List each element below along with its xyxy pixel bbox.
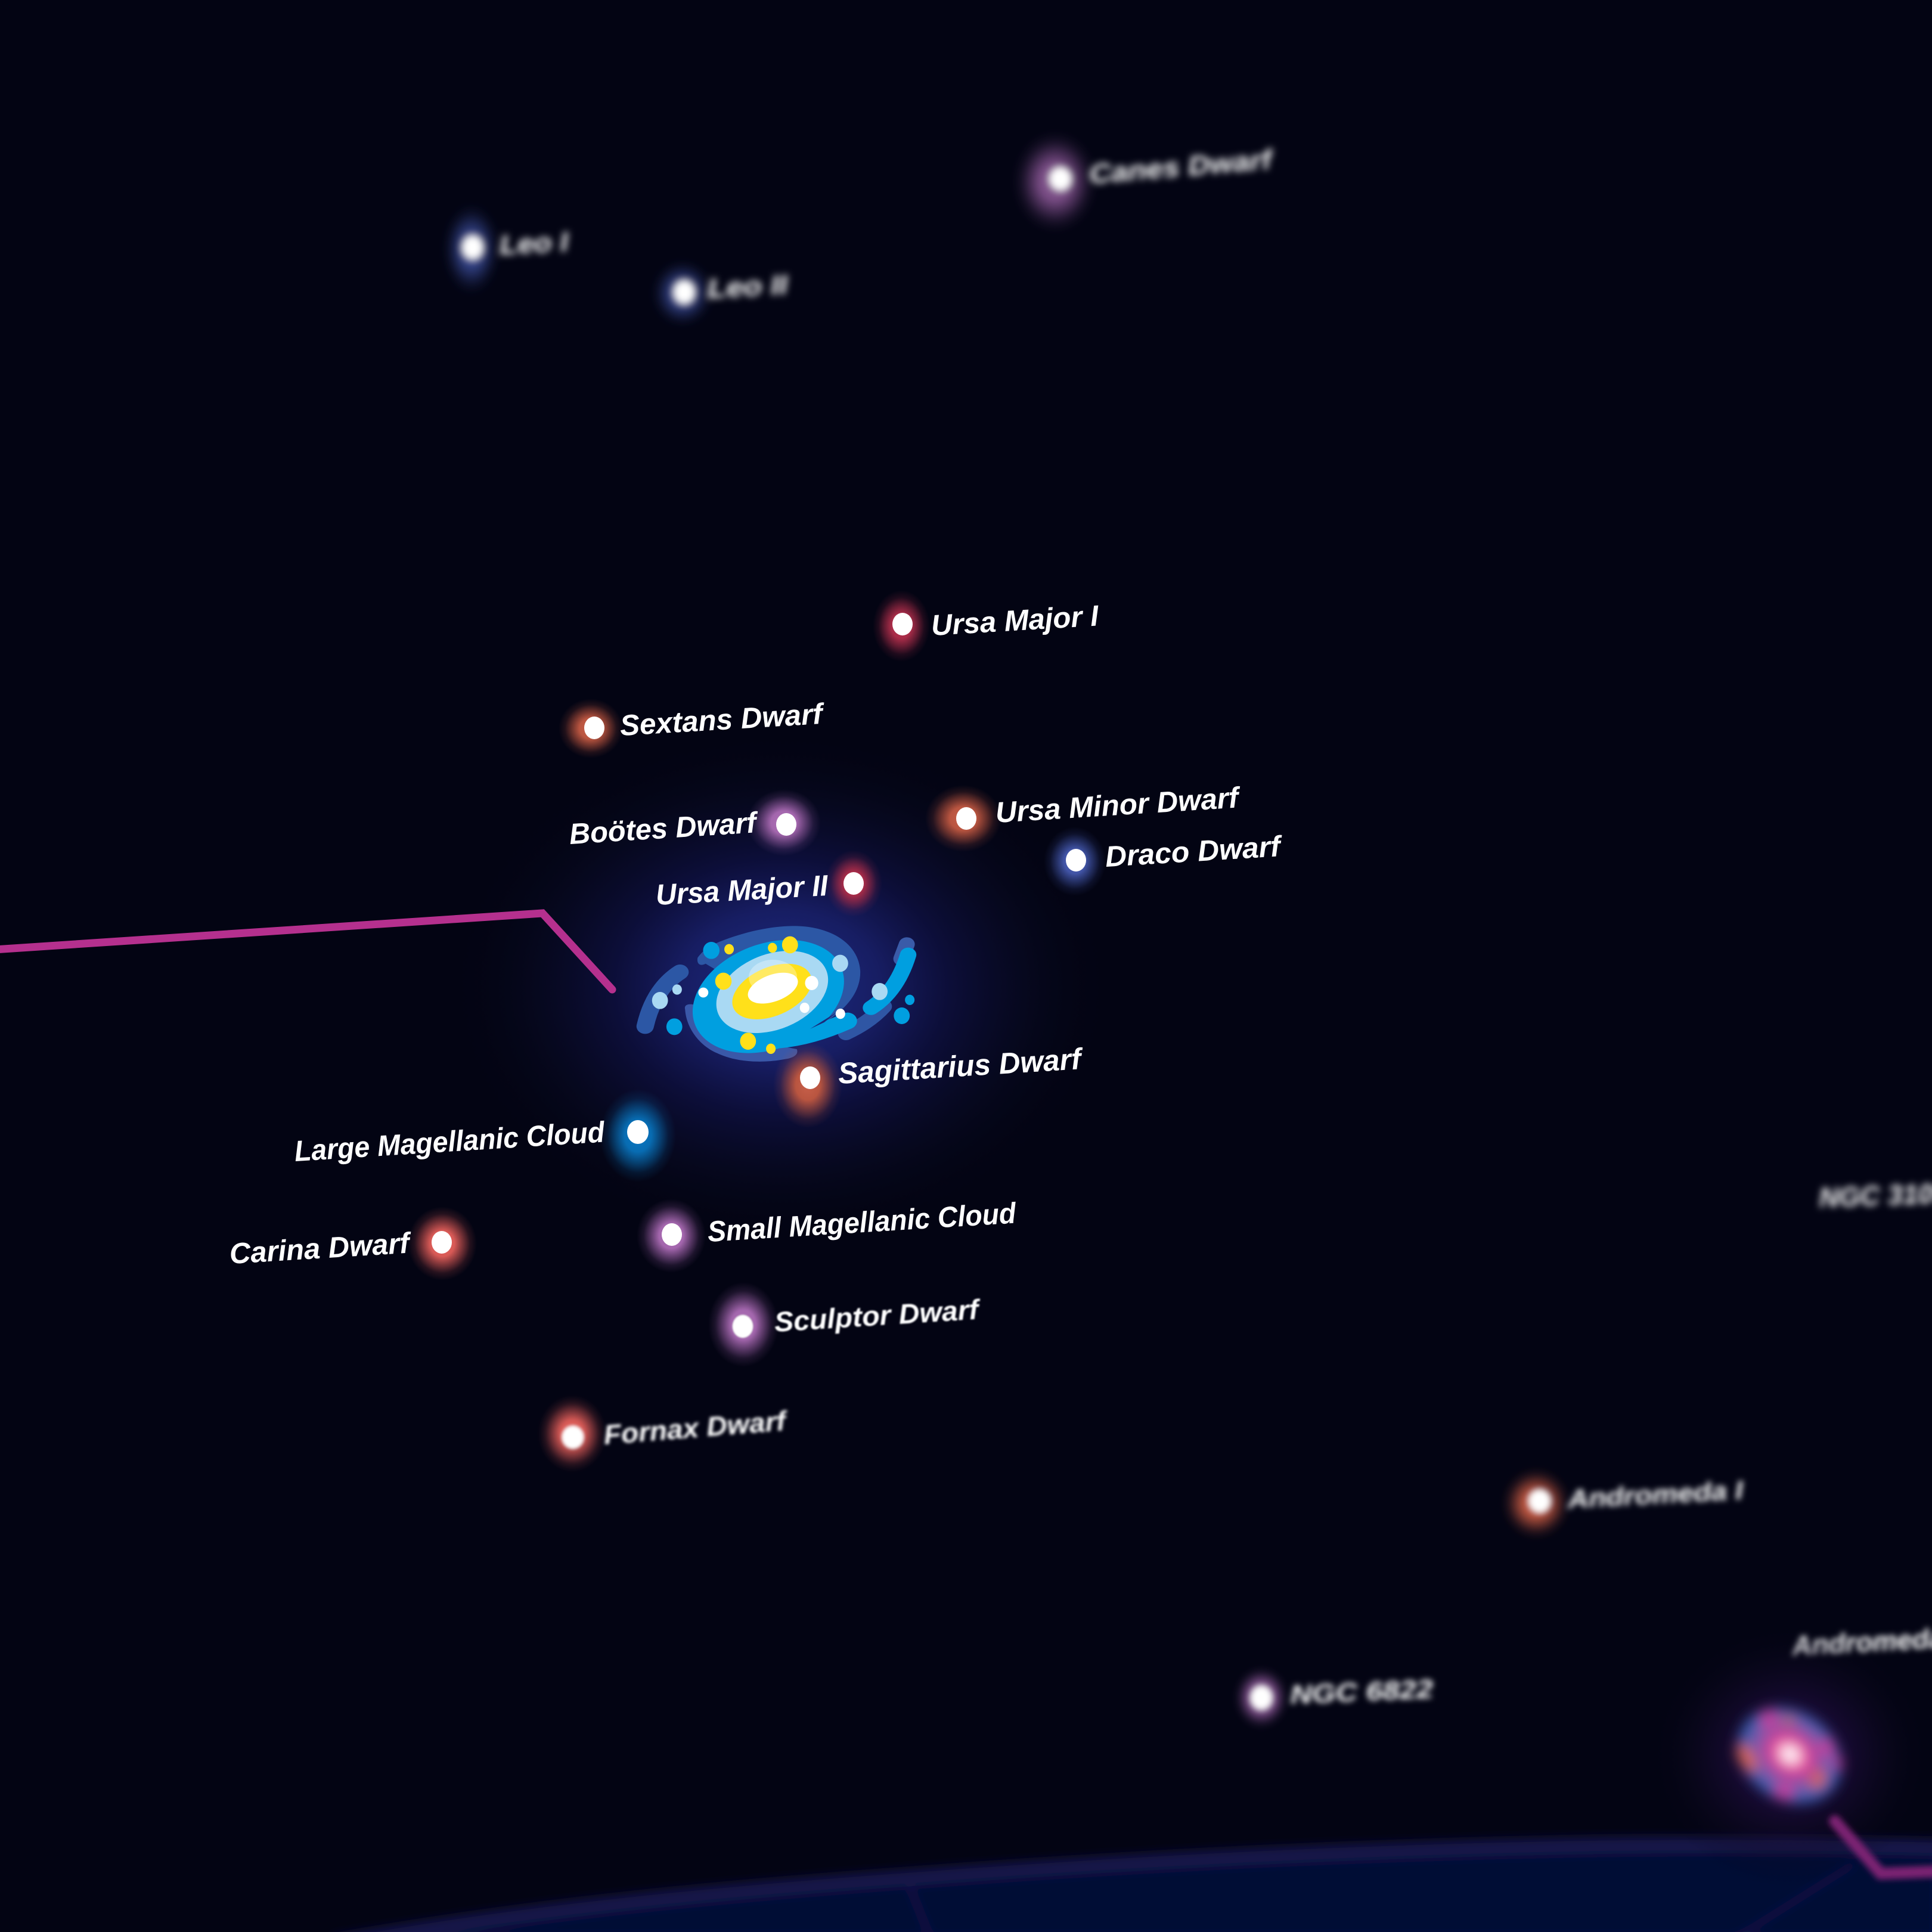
yellow clusters [715, 936, 798, 1054]
label: Ursa Minor Dwarf [994, 782, 1242, 829]
glow [747, 789, 821, 856]
label: Leo II [707, 269, 789, 304]
label: Sculptor Dwarf [773, 1293, 982, 1338]
disc tail [742, 1021, 848, 1041]
glow [1013, 132, 1097, 232]
pink clusters [1761, 1710, 1843, 1800]
star [1049, 167, 1072, 191]
glow [1502, 1468, 1571, 1539]
star [800, 1066, 820, 1089]
star [776, 813, 796, 836]
Milky Way galaxy icon [645, 917, 914, 1076]
callout line to Milky Way [0, 913, 612, 990]
satellite: Sculptor Dwarf [708, 1282, 982, 1367]
outer disc [1719, 1688, 1860, 1823]
satellite: Canes Dwarf [1013, 132, 1276, 232]
outer dark arm bottom [685, 1004, 797, 1062]
satellite: Draco Dwarf [1044, 827, 1284, 896]
right arm dark tip [901, 944, 907, 959]
star [892, 613, 913, 635]
satellite: NGC 6822 [1234, 1667, 1434, 1729]
glow [443, 204, 500, 294]
callout line to Andromeda [1835, 1821, 1932, 1874]
outer dark arm top [697, 926, 860, 1022]
main disc [669, 917, 867, 1076]
label: Small Magellanic Cloud [706, 1197, 1018, 1248]
inner disc [1736, 1702, 1846, 1808]
satellite: Andromeda I [1502, 1468, 1744, 1539]
label: Ursa Major I [930, 600, 1100, 642]
label: Andromeda I [1567, 1476, 1744, 1514]
lower right dark band [846, 1006, 884, 1033]
glow [1044, 827, 1106, 896]
glow [925, 785, 1001, 852]
satellite: Large Magellanic Cloud [293, 1089, 676, 1182]
core [1738, 1705, 1842, 1804]
glow [825, 850, 882, 917]
glow [1234, 1667, 1289, 1729]
yellow bulge [721, 952, 823, 1031]
label: Sagittarius Dwarf [837, 1042, 1084, 1090]
satellite: Boötes Dwarf [568, 789, 821, 856]
Andromeda galaxy icon [1719, 1688, 1860, 1823]
label: Carina Dwarf [228, 1227, 413, 1270]
star [584, 717, 604, 739]
satellite: Leo II [652, 260, 789, 327]
glow [773, 1042, 842, 1128]
star [674, 280, 695, 304]
glow [652, 260, 714, 327]
satellite: Fornax Dwarf [538, 1395, 790, 1472]
label: NGC 6822 [1289, 1674, 1434, 1710]
star [432, 1231, 452, 1254]
label: Draco Dwarf [1104, 830, 1284, 873]
star [733, 1315, 753, 1338]
satellite: Ursa Major I [873, 590, 1100, 662]
glow [538, 1395, 606, 1472]
satellite: Leo I [443, 204, 570, 294]
label: Boötes Dwarf [568, 807, 760, 851]
star [1066, 849, 1086, 872]
satellite: Sextans Dwarf [559, 698, 826, 758]
pale inner disc [699, 934, 845, 1050]
satellite: Sagittarius Dwarf [773, 1042, 1084, 1128]
glow [637, 1199, 706, 1273]
glow [708, 1282, 779, 1367]
star [662, 1223, 682, 1246]
star [1251, 1686, 1272, 1710]
white core [742, 966, 804, 1010]
satellite: Small Magellanic Cloud [637, 1197, 1018, 1273]
orange clusters [1732, 1715, 1825, 1788]
Andromeda galaxy halo [1650, 1624, 1930, 1887]
left arm [645, 972, 680, 1027]
star [562, 1426, 584, 1449]
glow [408, 1207, 477, 1280]
star [1529, 1490, 1550, 1512]
planet horizon [334, 1845, 1932, 1932]
glow [600, 1089, 676, 1182]
planet body [334, 1845, 1932, 1932]
star [843, 872, 864, 895]
label: Large Magellanic Cloud [293, 1116, 606, 1168]
label: Sextans Dwarf [619, 698, 826, 742]
star [956, 807, 976, 830]
satellite: Ursa Major II [655, 850, 882, 917]
planet grid line left [905, 1876, 930, 1932]
wedge gap [810, 1012, 838, 1029]
glow [559, 699, 623, 758]
label: Fornax Dwarf [603, 1405, 790, 1450]
glow [873, 590, 930, 662]
planet grid line right [1737, 1864, 1854, 1932]
label: Canes Dwarf [1089, 144, 1276, 190]
bulge highlight [749, 960, 797, 995]
star [462, 235, 483, 259]
label: Ursa Major II [655, 870, 830, 911]
white clusters [698, 976, 845, 1019]
satellite: Ursa Minor Dwarf [925, 782, 1242, 852]
pale clusters [652, 955, 888, 1009]
Milky Way halo glow [447, 730, 1115, 1243]
label: Leo I [499, 226, 570, 261]
star [627, 1120, 649, 1144]
satellite: Carina Dwarf [228, 1207, 477, 1280]
blue clusters [666, 942, 914, 1035]
right arm [871, 955, 908, 1008]
